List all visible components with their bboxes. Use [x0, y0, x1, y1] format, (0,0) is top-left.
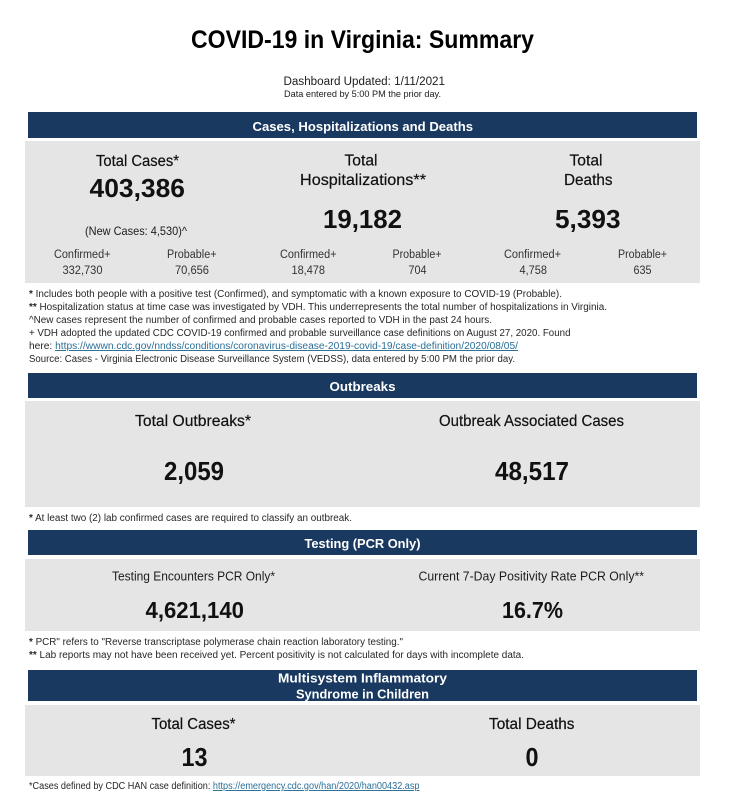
total outbreaks label: Total Outbreaks*	[135, 413, 251, 430]
total cases value: 403,386	[90, 175, 185, 203]
section header: cases, hospitalizations and deaths: Cases, Hospitalizations and Deaths	[252, 119, 473, 134]
deaths probable: Probable+	[618, 249, 667, 261]
dashboard updated date: Dashboard Updated: 1/11/2021	[284, 76, 445, 88]
panel: outbreaks	[25, 401, 700, 507]
footnotes: cases: ^New cases represent the number of confirmed and probable cases reported to VDH in the past 24 hours.	[29, 315, 492, 326]
new cases: (New Cases: 4,530)^	[85, 224, 187, 238]
hospitalizations confirmed: Confirmed+	[280, 249, 337, 261]
total cases label: Total Cases*	[96, 153, 179, 170]
footnotes: cases: ** Hospitalization status at time case was investigated by VDH. This underrepresents the total number of hospitalizations in Virginia.	[29, 302, 607, 313]
footnotes: cases	[29, 289, 607, 365]
hospitalizations probable: 704	[408, 265, 427, 277]
testing encounters label: Testing Encounters PCR Only*	[112, 568, 275, 584]
positivity rate value: 16.7%	[502, 597, 563, 623]
footnote: MIS-C: *Cases defined by CDC HAN case definition: https://emergency.cdc.gov/han/2020/han00432.asp	[29, 781, 420, 792]
MIS-C total deaths value: 0	[526, 744, 538, 772]
panel: testing	[25, 559, 700, 631]
section header: multisystem inflammatory syndrome in children	[28, 670, 697, 702]
hospitalizations probable: Probable+	[392, 249, 442, 261]
footnote: outbreaks: * At least two (2) lab confirmed cases are required to classify an outbreak.	[29, 513, 352, 524]
MIS-C total cases value: 13	[182, 744, 208, 772]
cases confirmed	[54, 249, 111, 277]
total deaths label: Total	[570, 152, 602, 170]
deaths confirmed: Confirmed+	[504, 249, 561, 261]
data entry note: Data entered by 5:00 PM the prior day.	[284, 89, 441, 100]
deaths probable	[618, 249, 667, 277]
cases probable: Probable+	[167, 249, 217, 261]
section header: outbreaks: Outbreaks	[330, 379, 396, 394]
hospitalizations probable	[392, 249, 442, 277]
outbreak associated cases value: 48,517	[495, 458, 569, 486]
MIS-C total deaths label: Total Deaths	[489, 716, 575, 733]
cases confirmed: 332,730	[62, 265, 102, 277]
hospitalizations confirmed: 18,478	[292, 265, 325, 277]
total hospitalizations label: Hospitalizations**	[300, 172, 426, 189]
hospitalizations confirmed	[280, 249, 337, 277]
title: COVID-19 in Virginia: Summary	[191, 26, 534, 54]
cases confirmed: Confirmed+	[54, 249, 111, 261]
footnotes: cases: + VDH adopted the updated CDC COVID-19 confirmed and probable surveillance case definitions on August 27, 2020. Found	[29, 328, 570, 339]
outbreak associated cases label: Outbreak Associated Cases	[439, 413, 624, 430]
footnotes: testing: * PCR" refers to "Reverse transcriptase polymerase chain reaction laboratory testing."	[29, 637, 404, 648]
section header: multisystem inflammatory syndrome in children: Multisystem Inflammatory	[278, 670, 448, 686]
deaths confirmed	[504, 249, 561, 277]
footnotes: cases: Source: Cases - Virginia Electronic Disease Surveillance System (VEDSS), data entered by 5:00 PM the prior day.	[29, 354, 515, 365]
panel: cases, hospitalizations and deaths	[25, 141, 700, 283]
cases probable: 70,656	[175, 265, 209, 277]
MIS-C total cases label: Total Cases*	[152, 716, 236, 733]
footnotes: testing: ** Lab reports may not have been received yet. Percent positivity is not calculated for days with incomplete data.	[29, 650, 524, 661]
section header: multisystem inflammatory syndrome in children: Syndrome in Children	[296, 686, 429, 702]
section header: outbreaks	[28, 373, 697, 398]
footnotes: testing	[29, 637, 524, 661]
total hospitalizations label: Total	[344, 152, 378, 170]
total outbreaks value: 2,059	[164, 458, 224, 486]
total deaths label: Deaths	[564, 172, 613, 189]
deaths probable: 635	[634, 265, 652, 277]
footnotes: cases: * Includes both people with a positive test (Confirmed), and symptomatic with a known exposure to COVID-19 (Probable).	[29, 289, 562, 300]
footnotes: cases: here: https://wwwn.cdc.gov/nndss/conditions/coronavirus-disease-2019-covid-19/case-definition/2020/08/05/	[29, 341, 518, 352]
positivity rate label: Current 7-Day Positivity Rate PCR Only**	[418, 568, 644, 584]
total deaths label	[564, 152, 613, 189]
section header: testing	[28, 530, 697, 555]
total deaths value: 5,393	[555, 206, 620, 234]
panel: multisystem inflammatory syndrome in children	[25, 705, 700, 776]
deaths confirmed: 4,758	[520, 265, 547, 277]
total hospitalizations label	[300, 152, 426, 189]
section header: testing: Testing (PCR Only)	[304, 536, 420, 551]
section header: cases, hospitalizations and deaths	[28, 112, 697, 138]
testing encounters value: 4,621,140	[146, 597, 244, 623]
total hospitalizations value: 19,182	[323, 206, 402, 234]
cases probable	[167, 249, 217, 277]
